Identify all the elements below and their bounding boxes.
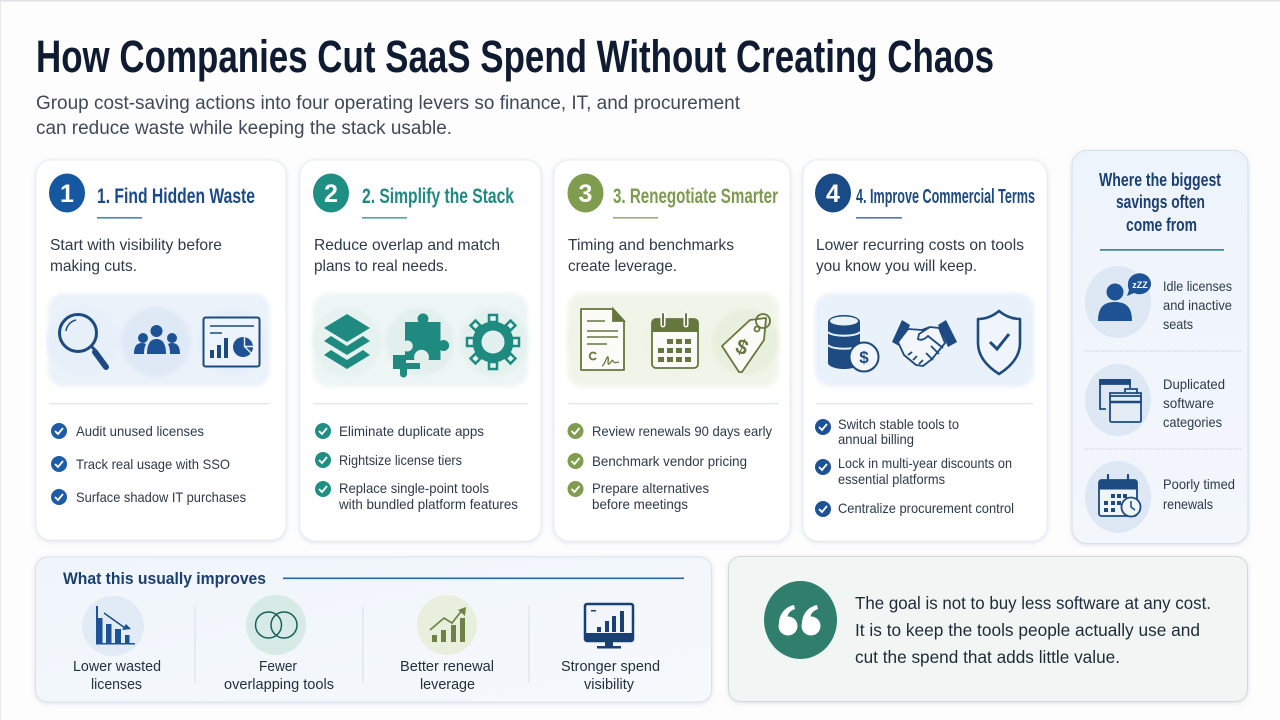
sidebar heading: [1099, 170, 1221, 235]
metric: stronger spend visibility: visibility: [584, 677, 635, 693]
number badge 4: 4: [826, 180, 840, 208]
subtitle: Group cost-saving actions into four operating levers so finance, IT, and procurement: [36, 93, 741, 114]
number badge 3: 3: [579, 180, 592, 208]
panel: what this usually improves: [36, 557, 712, 702]
description 4: Lower recurring costs on tools: [816, 237, 1024, 254]
heading 1: 1. Find Hidden Waste: [97, 185, 255, 208]
checklist 3: [568, 423, 772, 512]
metric: lower wasted licenses: [73, 596, 161, 693]
checklist 1: [51, 423, 246, 505]
icon: stacked windows: [1100, 380, 1141, 422]
metric: better renewal leverage: leverage: [420, 677, 475, 693]
icon: shield: [978, 311, 1020, 374]
icon: people: [134, 325, 180, 354]
savings item: duplicated software: Duplicated: [1163, 376, 1225, 392]
description 4: you know you will keep.: [816, 258, 977, 275]
improves heading: What this usually improves: [63, 569, 266, 588]
checklist 3: Benchmark vendor pricing: [592, 453, 747, 469]
panel: 4 improve commercial terms: [803, 160, 1047, 541]
metric: fewer overlapping tools: overlapping tools: [224, 677, 334, 693]
icon: magnifier: [60, 314, 106, 367]
checklist 2: Eliminate duplicate apps: [339, 423, 484, 439]
metric: better renewal leverage: Better renewal: [400, 659, 494, 675]
checklist 2: Replace single-point tools: [339, 480, 489, 496]
checklist 3: before meetings: [592, 496, 688, 512]
checklist 1: Surface shadow IT purchases: [76, 489, 246, 505]
savings item: idle licenses: and inactive: [1163, 297, 1232, 313]
icon: monitor: [585, 604, 633, 648]
description 1: [50, 237, 222, 275]
savings item: duplicated software: [1085, 364, 1225, 436]
checklist 1: Audit unused licenses: [76, 423, 204, 439]
icon: layers: [324, 314, 370, 369]
description 4: [816, 237, 1024, 275]
sidebar heading: savings often: [1116, 192, 1205, 212]
checklist 2: Rightsize license tiers: [339, 452, 462, 468]
description 2: [314, 237, 500, 275]
icon: quote badge: [764, 581, 837, 659]
savings item: duplicated software: software: [1163, 395, 1214, 411]
icon: coins database: [828, 315, 878, 372]
icon: overlapping circles: [256, 612, 297, 638]
icon: puzzle: [393, 313, 449, 378]
description 3: create leverage.: [568, 258, 677, 275]
subtitle: [36, 93, 741, 139]
checklist 3: Review renewals 90 days early: [592, 423, 772, 439]
panel: 2 simplify the stack: [300, 160, 541, 541]
icon: rising chart: [430, 607, 466, 642]
metric: lower wasted licenses: Lower wasted: [73, 659, 161, 675]
sidebar heading: Where the biggest: [1099, 170, 1221, 190]
icon: contract: [581, 309, 624, 370]
icon: dashboard: [204, 318, 260, 366]
icon: price tag: $: [732, 335, 752, 360]
metric: fewer overlapping tools: Fewer: [259, 659, 297, 675]
icon strip 3: [567, 293, 779, 387]
quote text: It is to keep the tools people actually use and: [855, 620, 1200, 640]
savings item: idle licenses: [1085, 266, 1232, 338]
icon: falling bars: [96, 606, 135, 644]
quote text: [855, 593, 1211, 667]
sidebar heading: come from: [1126, 215, 1197, 235]
metric: stronger spend visibility: Stronger spend: [561, 659, 660, 675]
heading 3: 3. Renegotiate Smarter: [613, 185, 778, 208]
checklist 3: Prepare alternatives: [592, 480, 709, 496]
subtitle: can reduce waste while keeping the stack usable.: [36, 118, 452, 139]
checklist 4: Switch stable tools to: [838, 416, 959, 432]
number badge 1: 1: [60, 180, 74, 208]
savings item: poorly timed renewals: [1085, 461, 1235, 533]
title: How Companies Cut SaaS Spend Without Creating Chaos: [36, 31, 994, 82]
savings item: idle licenses: seats: [1163, 316, 1193, 332]
icon: calendar clock: [1099, 475, 1140, 516]
description 1: making cuts.: [50, 258, 137, 275]
icon: idle user: zZZ: [1132, 280, 1148, 290]
savings item: poorly timed renewals: Poorly timed: [1163, 476, 1235, 492]
number badge 1: [49, 174, 85, 212]
number badge 3: [568, 174, 604, 212]
checklist 4: Centralize procurement control: [838, 500, 1014, 516]
icon: price tag: [722, 314, 770, 372]
metric: fewer overlapping tools: [224, 595, 334, 693]
panel: quote callout: [728, 556, 1248, 702]
heading 4: 4. Improve Commercial Terms: [856, 186, 1035, 208]
icon: coins database: $: [859, 348, 869, 367]
description 2: plans to real needs.: [314, 258, 448, 275]
metric: better renewal leverage: [400, 595, 494, 693]
panel: biggest savings sidebar: [1072, 150, 1248, 544]
heading 2: 2. Simplify the Stack: [362, 185, 514, 208]
icon: idle user: [1098, 273, 1151, 321]
checklist 2: with bundled platform features: [338, 496, 518, 512]
description 3: Timing and benchmarks: [568, 237, 734, 254]
checklist 4: Lock in multi-year discounts on: [838, 455, 1012, 471]
description 2: Reduce overlap and match: [314, 237, 500, 254]
panel: 3 renegotiate smarter: [554, 160, 790, 541]
metric: stronger spend visibility: [561, 604, 660, 693]
savings item: duplicated software: categories: [1163, 414, 1222, 430]
checklist 4: [815, 416, 1014, 517]
number badge 2: 2: [324, 180, 338, 208]
icon: gear: [467, 315, 519, 369]
icon strip 4: [815, 293, 1034, 387]
metric: lower wasted licenses: licenses: [91, 677, 142, 693]
checklist 4: essential platforms: [838, 471, 945, 487]
number badge 2: [313, 174, 349, 212]
panel: 1 find hidden waste: [36, 160, 286, 540]
icon: calendar: [652, 314, 698, 368]
number badge 4: [815, 174, 851, 212]
description 3: [568, 237, 734, 275]
icon: handshake: [892, 320, 957, 366]
icon strip 2: [313, 293, 528, 387]
checklist 2: [315, 423, 518, 512]
checklist 1: Track real usage with SSO: [76, 456, 230, 472]
checklist 4: annual billing: [838, 431, 914, 447]
quote text: The goal is not to buy less software at any cost.: [855, 593, 1211, 613]
icon strip 1: [47, 293, 270, 387]
savings item: poorly timed renewals: renewals: [1163, 496, 1213, 512]
quote text: cut the spend that adds little value.: [855, 647, 1120, 667]
description 1: Start with visibility before: [50, 237, 222, 254]
savings item: idle licenses: Idle licenses: [1163, 278, 1232, 294]
